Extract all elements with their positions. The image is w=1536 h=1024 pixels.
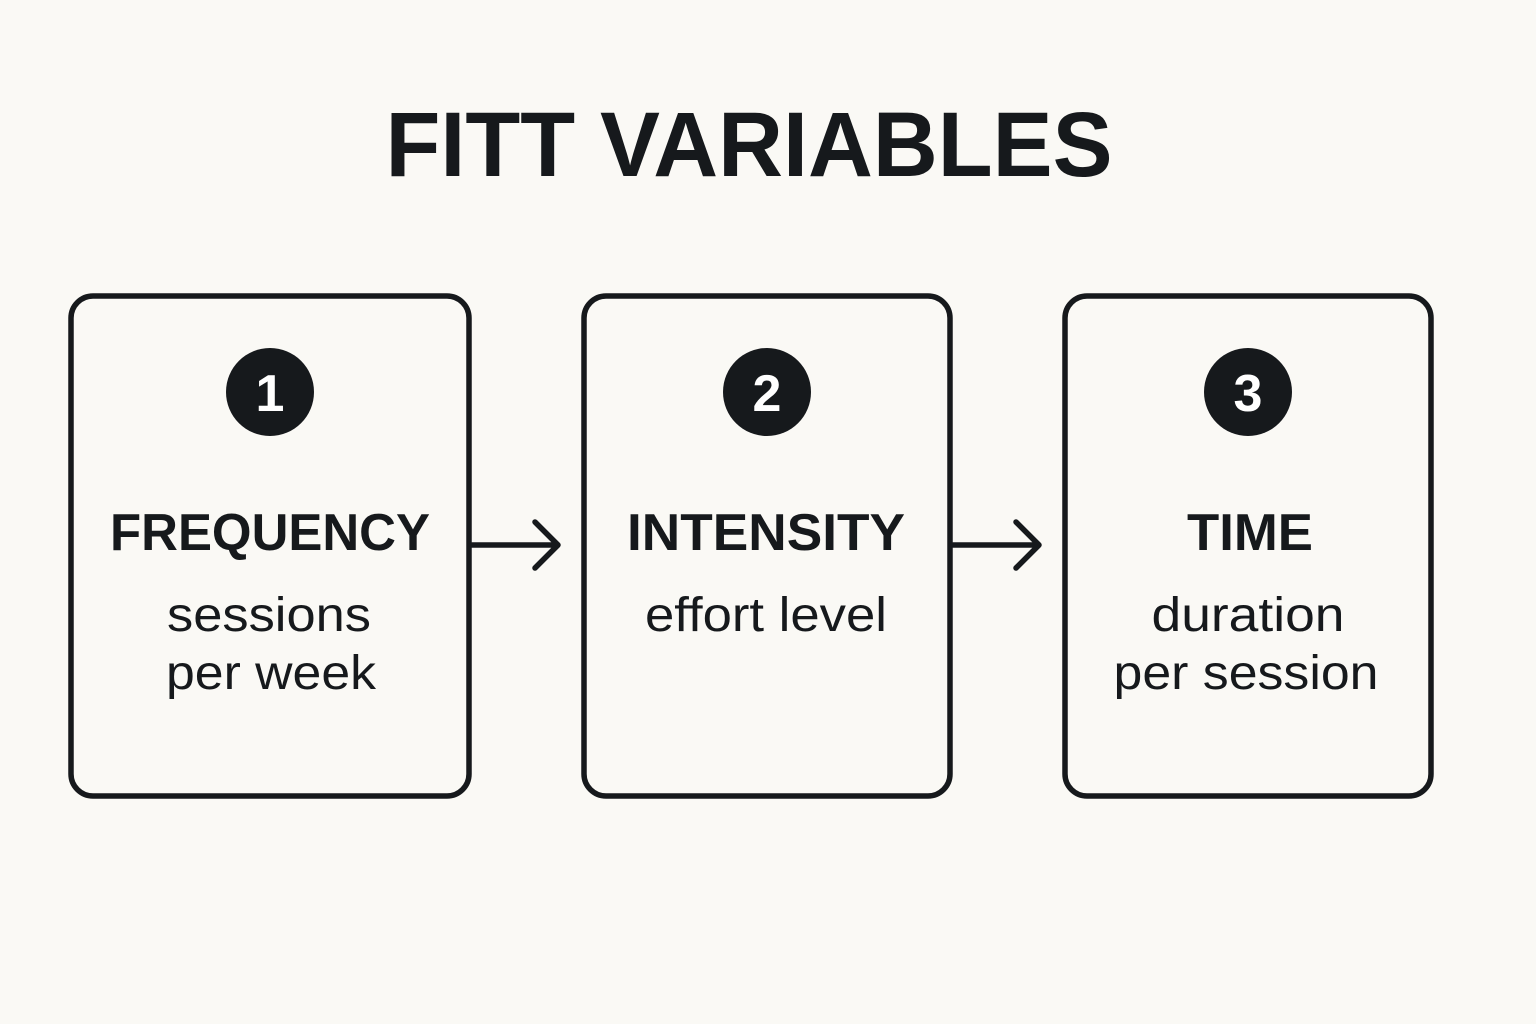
heading: frequency: FREQUENCY xyxy=(110,504,430,562)
heading: time: TIME xyxy=(1187,504,1313,562)
text: duration per session: per session xyxy=(1114,647,1378,700)
arrow: intensity to time xyxy=(953,522,1039,568)
icon: number 2 xyxy=(723,348,811,436)
text: sessions per week: sessions xyxy=(167,589,371,642)
text: sessions per week: per week xyxy=(166,647,377,700)
icon: number 1: 1 xyxy=(256,365,284,423)
text: effort level: effort level xyxy=(645,589,887,642)
icon: number 2: 2 xyxy=(753,365,781,423)
icon: number 1 xyxy=(226,348,314,436)
heading: intensity: INTENSITY xyxy=(627,504,905,562)
panel: frequency xyxy=(71,296,469,796)
arrow: frequency to intensity xyxy=(472,522,558,568)
panel: intensity xyxy=(584,296,950,796)
title: FITT VARIABLES xyxy=(386,94,1112,196)
icon: number 3 xyxy=(1204,348,1292,436)
text: duration per session: duration xyxy=(1152,589,1344,642)
icon: number 3: 3 xyxy=(1234,365,1262,423)
panel: time xyxy=(1065,296,1431,796)
